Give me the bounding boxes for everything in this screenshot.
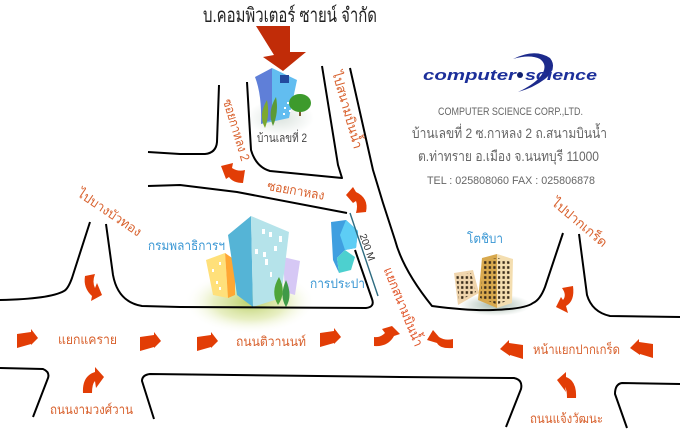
- label: dept of public works: กรมพลาธิการฯ: [148, 238, 225, 253]
- building: toshiba: [454, 254, 531, 316]
- address block: TEL : 025808060 FAX : 025806878: [427, 175, 595, 187]
- building: home office: [246, 68, 314, 136]
- label: house number: บ้านเลขที่ 2: [257, 129, 307, 145]
- title: บ.คอมพิวเตอร์ ซายน์ จำกัด: [203, 4, 377, 27]
- label: soi kalong 2: ซอยกาหลง 2: [220, 97, 253, 163]
- address block: ต.ท่าทราย อ.เมือง จ.นนทบุรี 11000: [418, 148, 599, 165]
- label: soi kalong: ซอยกาหลง: [266, 178, 326, 203]
- label: 200 m distance: 200 M: [357, 232, 377, 263]
- arrows: curved turns: [83, 163, 576, 398]
- logo: computer science: science: [525, 67, 597, 84]
- building: government complex: [184, 216, 316, 334]
- label: ngam wong wan road: ถนนงามวงศ์วาน: [50, 402, 133, 417]
- address block: [412, 106, 607, 187]
- label: to airport road: ไปสนามบินน้ำ: [329, 68, 368, 150]
- label: front of pak kret junction: หน้าแยกปากเกร็ด: [533, 340, 620, 357]
- arrows: straight traffic direction: [17, 328, 653, 359]
- address block: บ้านเลขที่ 2 ซ.กาหลง 2 ถ.สนามบินน้ำ: [412, 123, 607, 141]
- label: to bang bua thong: ไปบางบัวทอง: [74, 185, 145, 239]
- label: airport junction: แยกสนามบินน้ำ: [381, 264, 428, 349]
- label: khae rai junction: แยกแคราย: [58, 332, 117, 347]
- label: toshiba: โตชิบา: [467, 231, 503, 246]
- icon: big red arrow: [256, 26, 306, 71]
- label: waterworks: การประปา: [310, 276, 365, 291]
- label: tiwanon road: ถนนติวานนท์: [236, 334, 306, 349]
- label: chaeng watthana road: ถนนแจ้งวัฒนะ: [530, 411, 603, 426]
- logo: computer science: computer: [423, 67, 518, 84]
- building: waterworks: [331, 220, 358, 273]
- address block: COMPUTER SCIENCE CORP.,LTD.: [438, 106, 583, 118]
- label: to pak kret: ไปปากเกร็ด: [548, 193, 612, 250]
- logo: computer science: [423, 53, 597, 92]
